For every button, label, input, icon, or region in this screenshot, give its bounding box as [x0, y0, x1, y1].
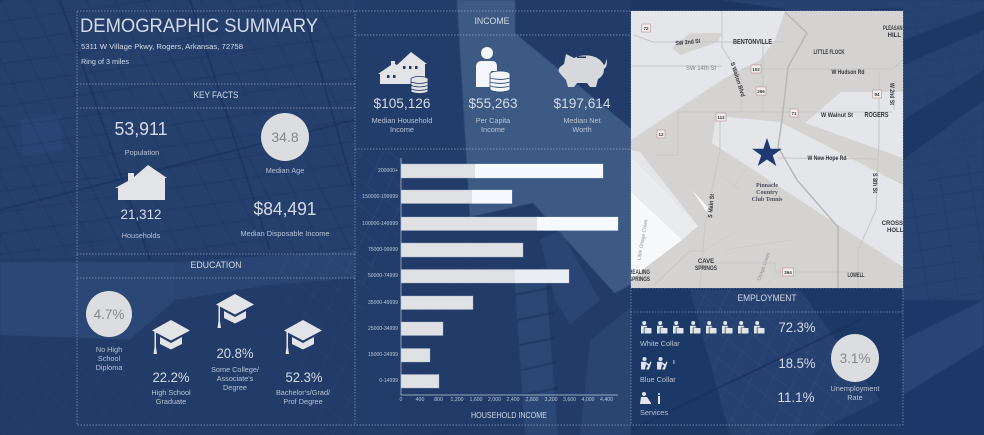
title block: DEMOGRAPHIC SUMMARY	[80, 15, 318, 37]
bar chart: household income: 200000+	[378, 168, 398, 174]
bar chart: household income: 0	[400, 397, 403, 403]
heading: education: EDUCATION	[190, 260, 242, 270]
map labels: W Walnut St	[821, 113, 853, 119]
panel: education: School	[98, 354, 121, 363]
icon: median age circle	[261, 113, 309, 161]
bar chart: household income: 800	[434, 397, 443, 403]
map panel	[629, 11, 914, 290]
panel: key facts: 21,312	[120, 206, 162, 222]
panel: education: Associate's	[217, 374, 254, 383]
panel: education: Degree	[223, 383, 247, 392]
map labels: HILL	[888, 33, 901, 39]
map labels: LITTLE FLOCK	[814, 50, 845, 56]
heading: income: INCOME	[474, 16, 510, 26]
map labels: SW 14th St	[686, 66, 716, 72]
bar chart: household income: 75000-99999	[368, 247, 398, 253]
panel: income: Income	[481, 125, 505, 134]
panel: education: Graduate	[156, 397, 186, 406]
map labels: Little Osage Creek	[636, 218, 650, 261]
panel: education: Prof Degree	[283, 397, 323, 406]
heading: key facts: KEY FACTS	[194, 90, 239, 100]
map labels: CROSS	[882, 221, 903, 227]
panel: key facts: Population	[125, 148, 159, 157]
map labels: Club Tennis	[752, 197, 783, 203]
map labels: W New Hope Rd	[808, 156, 847, 162]
map labels: ROGERS	[864, 112, 889, 119]
panel: education	[86, 291, 331, 406]
icon: graduation cap	[284, 320, 322, 354]
panel: education: Some College/	[211, 365, 260, 374]
icon: unemployment circle: 3.1%	[840, 351, 870, 366]
panel: key facts: 53,911	[114, 118, 168, 139]
bar chart: household income: 2,000	[488, 397, 501, 403]
panel: income: Median Net	[563, 116, 601, 125]
map labels: 94	[874, 92, 880, 97]
map labels: SW 2nd St	[675, 39, 701, 47]
bar chart: household income: 4,400	[600, 397, 613, 403]
bar chart: household income: 100000-149999	[362, 221, 398, 227]
bar chart: household income: 15000-24999	[368, 352, 398, 358]
panel: income: Median Household	[372, 116, 432, 125]
bar chart: household income: 2,800	[526, 397, 539, 403]
map labels: HEALING	[629, 270, 650, 276]
title block: 5311 W Village Pkwy, Rogers, Arkansas, 72758	[81, 42, 243, 51]
map labels: S Main St	[708, 194, 716, 218]
bar chart: household income: 0-14999	[379, 378, 398, 384]
panel: employment: 18.5%	[778, 356, 816, 371]
map labels: Osage Creek	[756, 251, 772, 282]
bar chart: household income: 3,600	[563, 397, 576, 403]
panel: education: 20.8%	[216, 346, 254, 361]
map highway shields	[642, 24, 882, 276]
icon: houses and coins	[378, 52, 428, 94]
icon: piggy bank	[559, 54, 607, 87]
panel: income	[372, 47, 611, 134]
panel: employment	[640, 320, 880, 417]
panel: key facts	[114, 113, 330, 240]
map labels: LOWELL	[848, 273, 865, 279]
icon row: blue collar	[641, 357, 674, 370]
title block	[80, 15, 318, 66]
panel: education: No High	[96, 345, 122, 354]
bar chart: household income: 25000-34999	[368, 326, 398, 332]
icon: median age circle: 34.8	[271, 129, 299, 145]
icon: person and coins	[476, 47, 510, 92]
panel: education: 22.2%	[152, 370, 190, 385]
panel: income: Per Capita	[476, 116, 511, 125]
map labels: W Hudson Rd	[832, 70, 865, 76]
panel: income: $105,126	[374, 96, 430, 111]
bar chart: household income: 50000-74999	[368, 273, 398, 279]
bar chart: household income: 3,200	[545, 397, 558, 403]
panel: education: Bachelor's/Grad/	[276, 388, 331, 397]
icon: graduation cap	[216, 294, 254, 328]
map labels: 266	[757, 89, 765, 94]
icon row: white collar	[641, 321, 764, 334]
panel: education: High School	[151, 388, 191, 397]
icon: house	[115, 165, 167, 200]
bar chart: household income: 2,400	[507, 397, 520, 403]
bar chart: household income: 35000-49999	[368, 300, 398, 306]
bar chart: household income	[362, 158, 618, 420]
map labels: Country	[756, 190, 778, 196]
icon: unemployment circle	[831, 334, 879, 382]
map labels: 72	[643, 26, 649, 31]
panel: employment: Services	[640, 408, 668, 417]
panel: income: $197,614	[554, 96, 611, 111]
map labels: S Walton Blvd	[729, 62, 745, 98]
panel: education: 52.3%	[286, 370, 322, 385]
panel: employment: White Collar	[640, 339, 680, 348]
bar chart: household income: 4,000	[582, 397, 595, 403]
panel: employment: Blue Collar	[640, 375, 676, 384]
panel: key facts: $84,491	[254, 199, 316, 219]
panel: education: Diploma	[96, 363, 123, 372]
panel: key facts: Households	[122, 231, 161, 240]
map labels	[629, 26, 914, 283]
title block: Ring of 3 miles	[81, 57, 129, 66]
bar chart: household income: 1,200	[451, 397, 464, 403]
panel: key facts: Median Age	[266, 166, 304, 175]
icon: graduation cap	[152, 320, 190, 354]
icon: no diploma circle	[86, 291, 132, 337]
heading: employment: EMPLOYMENT	[738, 293, 797, 303]
dashed panel borders	[77, 11, 903, 425]
map labels: 71	[791, 111, 797, 116]
panel: income: Income	[390, 125, 414, 134]
panel: income: Worth	[572, 125, 592, 134]
panel: income: $55,263	[468, 96, 518, 111]
bar chart: household income: HOUSEHOLD INCOME	[471, 411, 547, 420]
map labels: BENTONVILLE	[733, 39, 772, 46]
panel: employment: Unemployment	[830, 384, 880, 393]
panel: employment: 11.1%	[778, 390, 814, 405]
panel: key facts: Median Disposable Income	[240, 229, 330, 238]
map labels: Pinnacle	[756, 183, 778, 189]
panel: employment: Rate	[847, 393, 863, 402]
map labels: 102	[752, 67, 760, 72]
map labels: 112	[717, 115, 725, 120]
map labels: W 2nd St	[888, 83, 894, 105]
map labels: SPRINGS	[629, 277, 650, 283]
panel: employment: 72.3%	[778, 320, 816, 335]
icon row: services	[640, 392, 660, 404]
map labels: SPRINGS	[695, 266, 717, 272]
map labels: S 8th St	[871, 173, 877, 193]
map labels: CAVE	[698, 259, 714, 265]
map labels: 12	[658, 132, 664, 137]
icon: location star	[752, 138, 782, 166]
bar chart: household income: 150000-199999	[362, 194, 398, 200]
map labels: 264	[784, 270, 792, 275]
bar chart: household income: 1,600	[470, 397, 483, 403]
icon: no diploma circle: 4.7%	[94, 307, 124, 322]
map labels: HOLLOW	[887, 228, 914, 234]
bar chart: household income: 400	[416, 397, 424, 403]
map labels: PLEASANT	[883, 26, 905, 32]
